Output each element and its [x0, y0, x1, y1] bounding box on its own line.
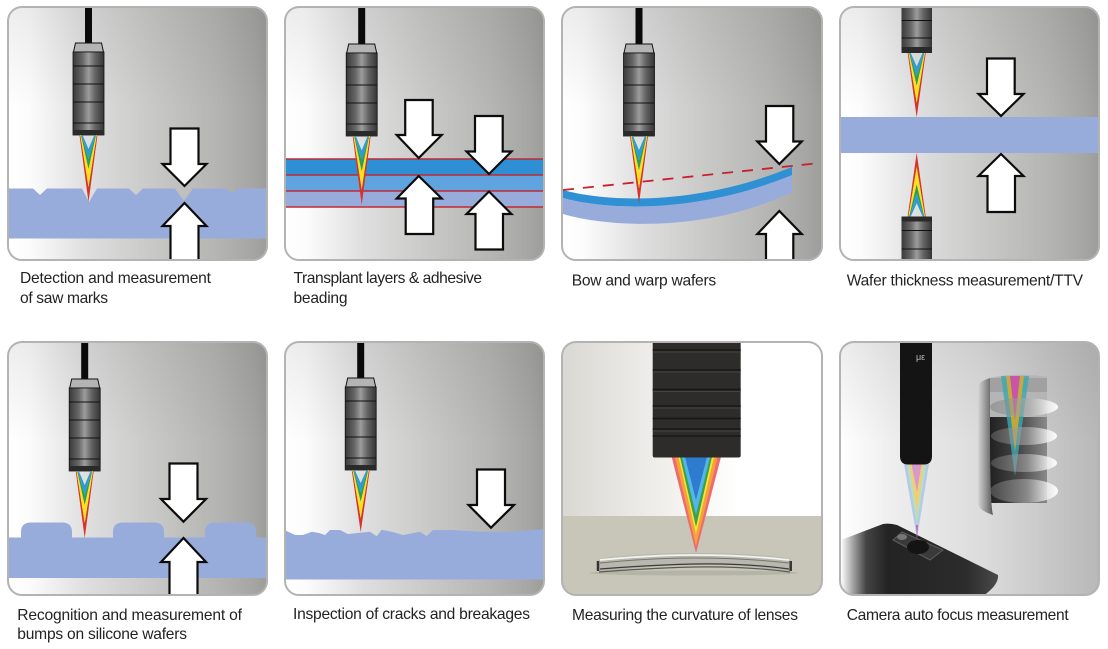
- coloured layers: [286, 159, 543, 207]
- sensor: [346, 0, 377, 136]
- caption: Recognition and measurement of: [17, 607, 243, 624]
- rainbow light cone: [352, 470, 370, 532]
- rough wafer: [286, 529, 544, 580]
- lens: [589, 553, 799, 576]
- panel frame: [285, 342, 544, 595]
- arrow up: [161, 538, 206, 606]
- caption: [17, 607, 243, 643]
- panel background: [840, 7, 1099, 260]
- sensor head: [653, 340, 741, 458]
- panel: camera auto focus: [840, 340, 1099, 624]
- wafer with bumps: [8, 522, 267, 578]
- arrow up: [978, 154, 1024, 212]
- phone body: [841, 524, 998, 596]
- panel frame: [285, 7, 544, 260]
- caption: [294, 270, 482, 307]
- wafer with saw marks: [8, 188, 267, 238]
- caption: Wafer thickness measurement/TTV: [847, 272, 1084, 290]
- caption: Measuring the curvature of lenses: [572, 607, 798, 624]
- arrow down: [978, 58, 1024, 116]
- arrow down: [161, 464, 206, 522]
- bottom light cone: [908, 153, 926, 216]
- caption: Inspection of cracks and breakages: [293, 606, 530, 623]
- warped wafer: [563, 167, 792, 224]
- sensor body: [900, 340, 932, 464]
- arrow pair 1 down: [397, 100, 442, 158]
- rainbow light cone: [672, 457, 721, 553]
- panel background: [8, 7, 267, 260]
- panel: cracks and breakages: [285, 333, 544, 623]
- arrow up: [757, 211, 802, 270]
- panel background: [840, 342, 1099, 595]
- panel: bow and warp: [562, 0, 822, 290]
- top sensor: [902, 5, 932, 53]
- caption: Transplant layers & adhesive: [294, 270, 482, 287]
- sensor: [69, 334, 100, 471]
- panel: transplant layers: [285, 0, 544, 307]
- arrow pair 2 down: [466, 116, 512, 174]
- arrow down: [162, 128, 206, 186]
- sensor logo: με: [916, 352, 925, 362]
- panel frame: [562, 7, 822, 260]
- cylinder cutaway: [978, 375, 1058, 515]
- panel background: [562, 342, 822, 595]
- arrow up: [162, 203, 206, 270]
- panel frame: [8, 7, 267, 260]
- rainbow light cone: [76, 471, 94, 538]
- sensor: [624, 0, 654, 136]
- arrow down: [468, 470, 514, 528]
- panel frame: [840, 342, 1099, 595]
- panel: wafer thickness: [840, 5, 1099, 290]
- pastel light cone: [904, 464, 929, 540]
- panel background: [8, 342, 267, 595]
- caption: of saw marks: [20, 290, 108, 307]
- panel: saw marks: [8, 0, 267, 307]
- caption: Detection and measurement: [20, 270, 212, 287]
- panel background: [562, 7, 822, 260]
- rainbow light cone: [630, 136, 648, 204]
- rainbow light cone: [80, 135, 98, 202]
- panel frame: [8, 342, 267, 595]
- bottom sensor: [902, 216, 932, 259]
- panel: bumps: [8, 334, 267, 643]
- caption: Bow and warp wafers: [572, 272, 716, 290]
- table surface: [562, 516, 822, 596]
- panel frame: [562, 342, 822, 595]
- panel: curvature of lenses: [562, 340, 822, 624]
- panel background: [285, 342, 544, 595]
- caption: Camera auto focus measurement: [847, 607, 1069, 624]
- sensor: [345, 333, 376, 470]
- panel background: [285, 7, 544, 260]
- panel frame: [840, 7, 1099, 260]
- caption: bumps on silicone wafers: [17, 626, 187, 643]
- top light cone: [908, 53, 926, 117]
- wafer: [840, 117, 1099, 153]
- arrow pair 2 up: [466, 192, 512, 250]
- dashed reference line: [563, 163, 820, 190]
- rainbow light cone: [353, 136, 371, 205]
- caption: [20, 270, 212, 307]
- arrow pair 1 up: [397, 176, 442, 234]
- camera module: [893, 532, 943, 560]
- sensor: [73, 0, 104, 135]
- arrow down: [757, 106, 802, 164]
- caption: beading: [294, 290, 348, 307]
